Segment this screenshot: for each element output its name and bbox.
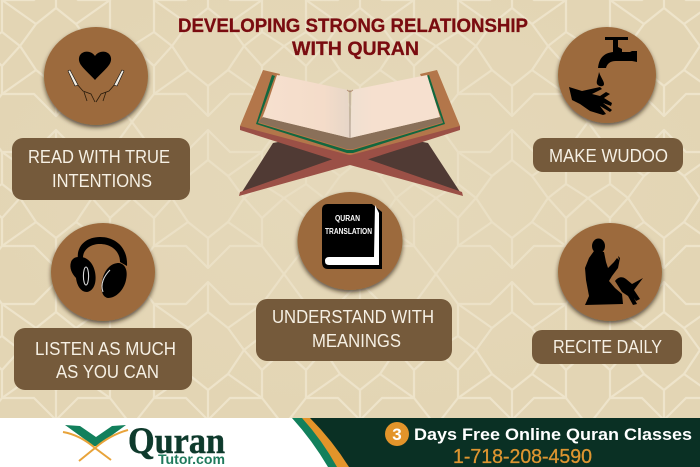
offer: 3 days free: 3 — [392, 425, 402, 444]
panel: listen as much as you can — [14, 223, 192, 390]
title — [178, 16, 528, 60]
label: read with true intentions — [12, 138, 190, 200]
label: listen as much as you can — [14, 328, 192, 390]
panel: recite daily — [532, 223, 682, 364]
label: recite daily — [532, 330, 682, 364]
label: listen as much as you can: LISTEN AS MUCH — [35, 339, 176, 359]
footer swoosh and dark panel — [292, 418, 700, 467]
label: read with true intentions: READ WITH TRUE — [28, 147, 170, 167]
icon: kneeling person reciting — [558, 223, 662, 321]
label: listen as much as you can: AS YOU CAN — [56, 362, 159, 382]
label: understand with meanings — [256, 299, 452, 361]
title: DEVELOPING STRONG RELATIONSHIP — [178, 16, 528, 37]
footer banner — [0, 418, 700, 467]
label: recite daily: RECITE DAILY — [553, 337, 662, 357]
panel: understand with meanings — [256, 192, 452, 361]
icon: tap and washing hand — [558, 27, 656, 123]
title: WITH QURAN — [292, 39, 419, 60]
logo: Quran Tutor: Quran — [128, 421, 225, 462]
logo: Quran Tutor — [63, 421, 225, 467]
icon: Quran translation book: QURAN — [335, 214, 360, 223]
label: make wudoo: MAKE WUDOO — [549, 146, 668, 166]
offer: 3 days free: Days Free Online Quran Classes — [414, 425, 692, 444]
panel: make wudoo — [533, 27, 683, 172]
offer: 3 days free — [385, 422, 692, 446]
icon: Quran translation book: TRANSLATION — [325, 227, 372, 236]
icon: Quran translation book — [298, 192, 402, 290]
illustration: open Quran on stand — [239, 70, 463, 196]
panel: read with true intentions — [12, 27, 190, 200]
label: understand with meanings: MEANINGS — [312, 331, 401, 351]
icon: heart in open hands — [44, 27, 148, 125]
label: make wudoo — [533, 138, 683, 172]
label: read with true intentions: INTENTIONS — [52, 171, 152, 191]
icon: headphones — [51, 223, 155, 321]
logo: Quran Tutor: Tutor.com — [158, 451, 225, 467]
label: understand with meanings: UNDERSTAND WITH — [272, 307, 434, 327]
